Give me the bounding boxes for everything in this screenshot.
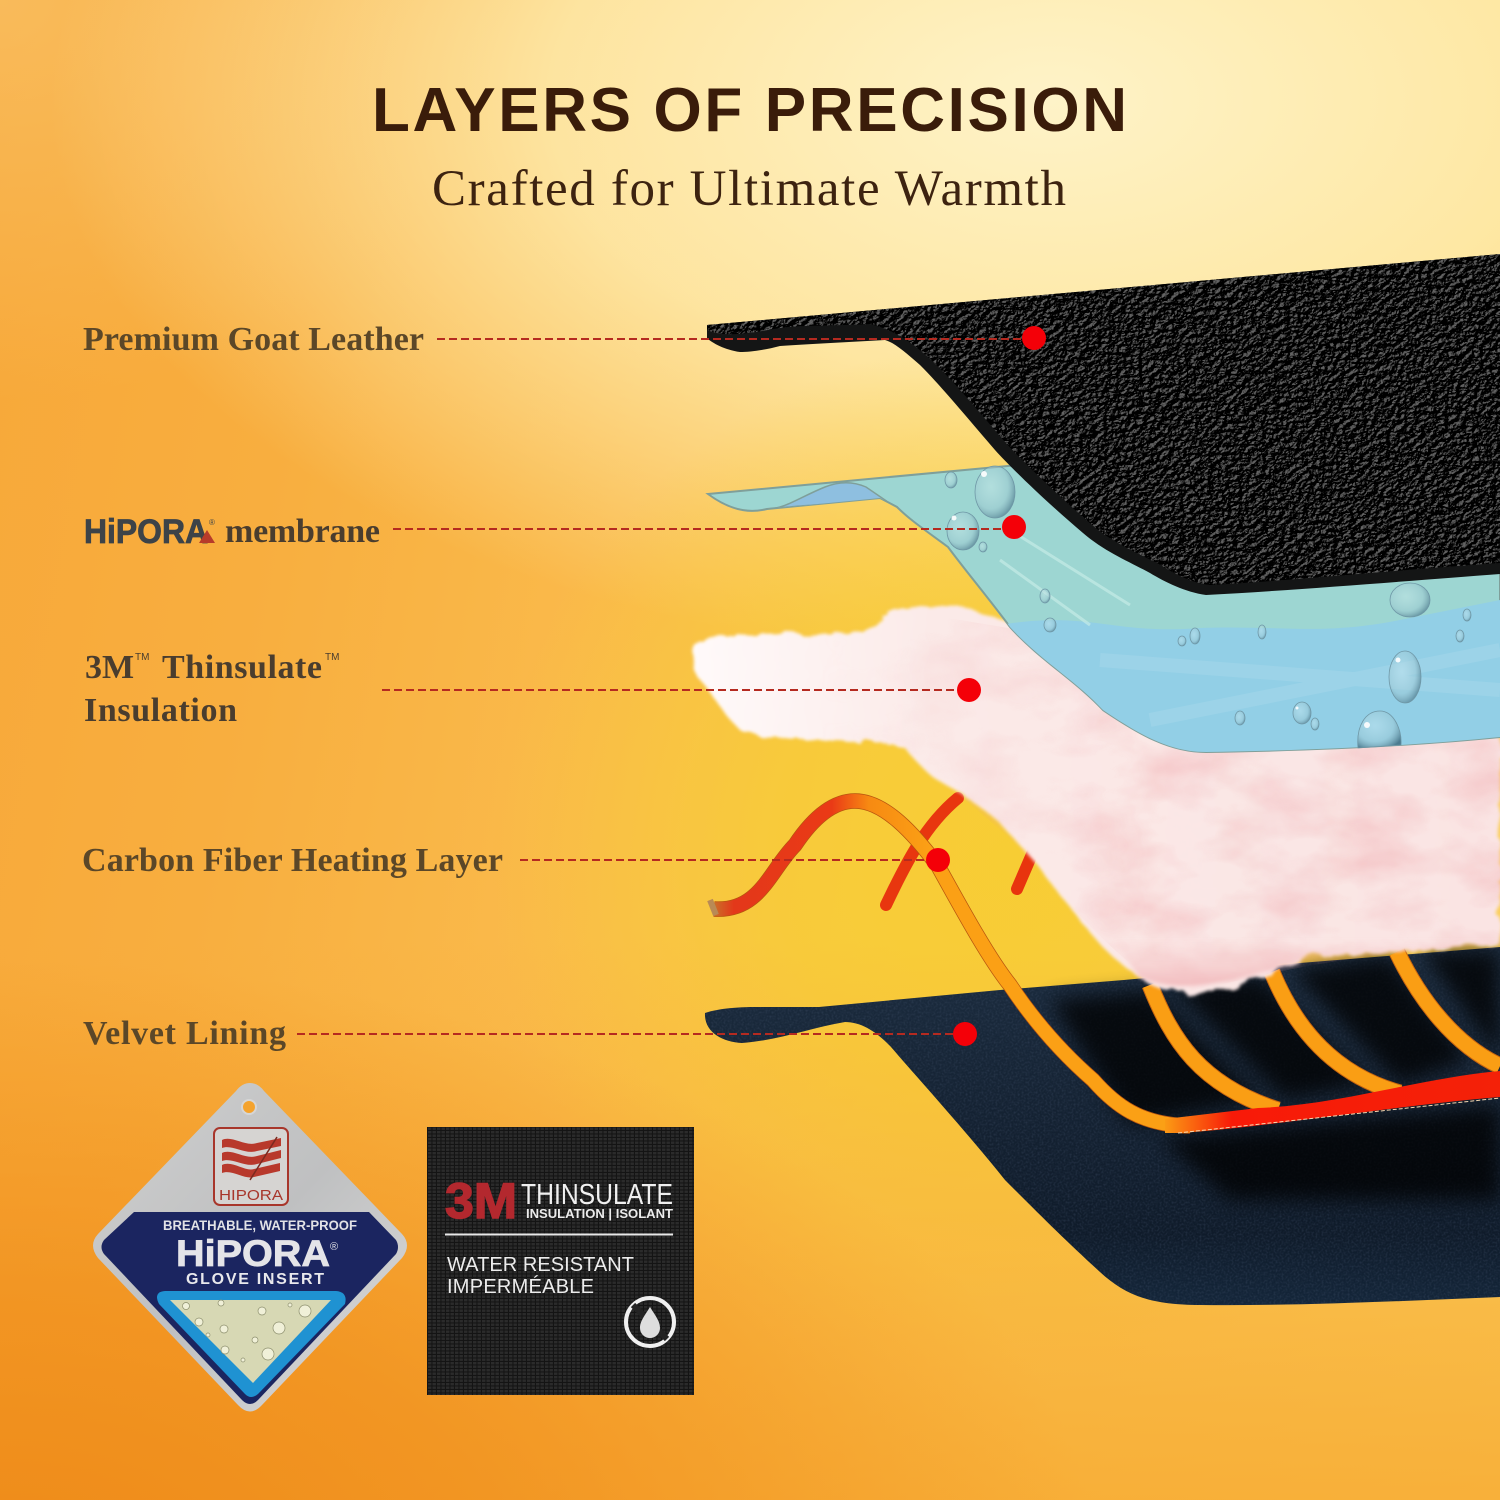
badge: 3M Thinsulate patch <box>427 1127 694 1395</box>
badge: 3M Thinsulate patch: 3M <box>445 1173 517 1229</box>
layer: velvet lining <box>705 947 1500 1305</box>
badge: HIPORA tag: ® <box>330 1241 338 1253</box>
callout: 3M Thinsulate Insulation: Thinsulate <box>162 649 322 686</box>
callout: HIPORA membrane: membrane <box>225 513 380 550</box>
callout: HIPORA membrane: ® <box>209 518 215 527</box>
callout: 3M Thinsulate Insulation: TM <box>135 652 149 663</box>
navy panel <box>102 1212 398 1404</box>
badge: 3M Thinsulate patch: IMPERMÉABLE <box>447 1275 594 1298</box>
callout: Premium Goat Leather: Premium Goat Leather <box>83 321 424 358</box>
heating wire: front strand and rungs <box>710 801 1500 1133</box>
badge: 3M Thinsulate patch: INSULATION | ISOLANT <box>526 1207 673 1221</box>
layer: goat leather <box>707 254 1500 595</box>
icon: water resistant <box>626 1298 674 1346</box>
callout: 3M Thinsulate Insulation: Insulation <box>84 692 237 729</box>
callout: Velvet Lining: Velvet Lining <box>83 1015 286 1052</box>
badge: HIPORA tag: GLOVE INSERT <box>186 1271 324 1288</box>
badge: HIPORA tag <box>93 1083 407 1412</box>
callout: Carbon Fiber Heating Layer: Carbon Fiber Heating Layer <box>82 842 503 879</box>
callout: Premium Goat Leather <box>83 321 1046 358</box>
callout: Velvet Lining <box>83 1015 977 1052</box>
heater shadows on velvet <box>1050 950 1500 1200</box>
badge: HIPORA tag: BREATHABLE, WATER-PROOF <box>163 1218 357 1233</box>
heating wire: back strands <box>886 798 1036 905</box>
callout: 3M Thinsulate Insulation: 3M <box>85 649 134 686</box>
badge: 3M Thinsulate patch: THINSULATE <box>521 1179 673 1211</box>
callout: 3M Thinsulate Insulation: TM <box>325 652 339 663</box>
subtitle: Crafted for Ultimate Warmth <box>432 161 1066 217</box>
callout: HIPORA membrane: HiPORA <box>84 513 208 551</box>
callout: HIPORA membrane <box>84 513 1026 551</box>
badge: HIPORA tag: HiPORA <box>176 1233 330 1274</box>
HIPORA flag logo <box>214 1128 288 1205</box>
droplet highlights <box>952 471 1400 728</box>
callout: Carbon Fiber Heating Layer <box>82 842 950 879</box>
layer: 3M Thinsulate insulation <box>692 605 1500 993</box>
HIPORA flag logo: HIPORA <box>219 1187 283 1204</box>
title: LAYERS OF PRECISION <box>372 76 1127 145</box>
callout: 3M Thinsulate Insulation <box>84 649 981 729</box>
waterproof swatch <box>157 1291 346 1397</box>
badge: 3M Thinsulate patch: WATER RESISTANT <box>447 1254 634 1276</box>
layer: HIPORA membrane <box>706 464 1500 753</box>
droplets <box>945 466 1471 748</box>
